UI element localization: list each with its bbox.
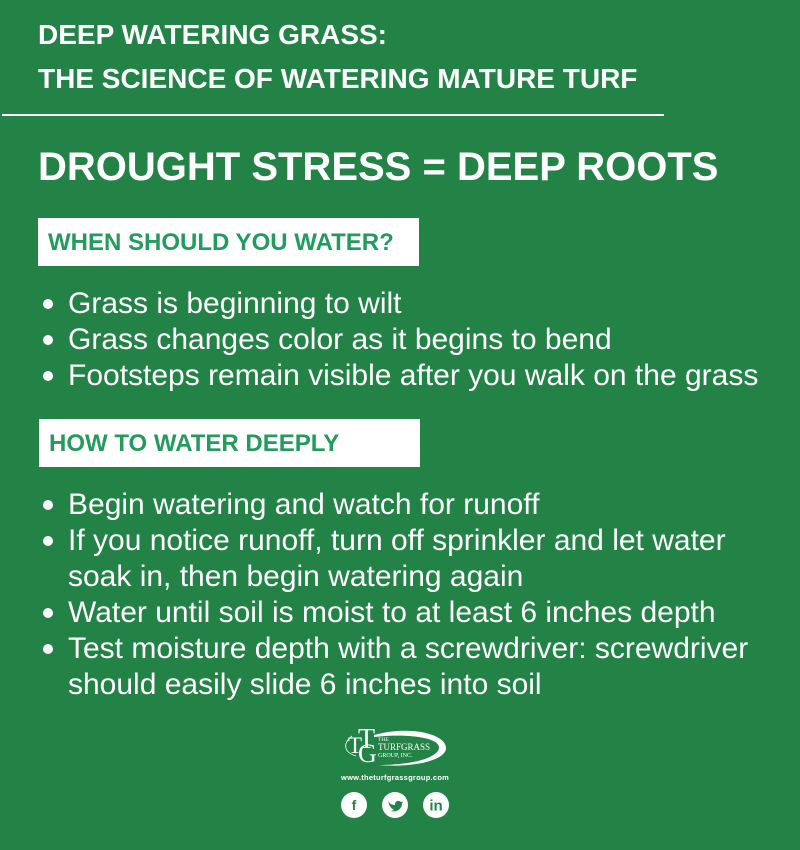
logo: The Turfgrass Group: TURFGRASS (378, 742, 430, 752)
bullet list: how to water (43, 488, 748, 701)
bullet list: how to water: Water until soil is moist to at least 6 inches depth (68, 596, 716, 629)
icon: linkedin (423, 792, 449, 818)
section heading: how to water deeply (39, 419, 420, 467)
logo: The Turfgrass Group: T (358, 724, 375, 755)
title (38, 19, 637, 94)
bullet list: when to water: Footsteps remain visible after you walk on the grass (68, 359, 758, 392)
icon: facebook (341, 792, 367, 818)
logo: The Turfgrass Group: G (358, 739, 377, 768)
icon: twitter (382, 792, 408, 818)
title: DEEP WATERING GRASS: (38, 19, 387, 50)
bullet list: when to water: Grass changes color as it begins to bend (68, 323, 612, 356)
section heading: how to water deeply: HOW TO WATER DEEPLY (49, 430, 339, 457)
icon: facebook: f (352, 797, 357, 813)
bullet list: how to water: Begin watering and watch for runoff (68, 488, 539, 521)
bullet list: how to water: If you notice runoff, turn off sprinkler and let water (68, 524, 726, 557)
section heading: when should you water (38, 218, 419, 266)
main heading: DROUGHT STRESS = DEEP ROOTS (38, 145, 718, 189)
section heading: when should you water: WHEN SHOULD YOU WATER? (48, 229, 394, 256)
bullet list: when to water: Grass is beginning to wilt (68, 287, 402, 320)
bullet list: how to water: should easily slide 6 inches into soil (68, 668, 542, 701)
logo: The Turfgrass Group: THE (378, 737, 389, 743)
website: www.theturfgrassgroup.com (341, 773, 449, 782)
bullet list: when to water (43, 287, 758, 392)
logo: The Turfgrass Group (345, 724, 446, 768)
title: THE SCIENCE OF WATERING MATURE TURF (38, 63, 637, 94)
icon: linkedin: in (429, 798, 443, 814)
bullet list: how to water: soak in, then begin watering again (68, 560, 523, 593)
logo: The Turfgrass Group: GROUP, INC. (378, 753, 413, 759)
bullet list: how to water: Test moisture depth with a screwdriver: screwdriver (68, 632, 748, 665)
logo: The Turfgrass Group: T (348, 733, 362, 758)
